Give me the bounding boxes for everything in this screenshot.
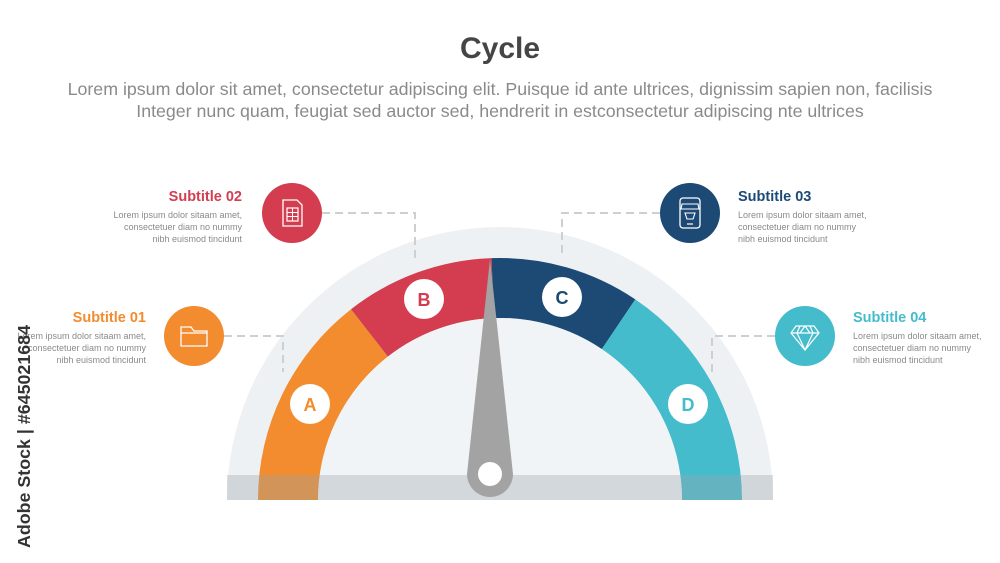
text block: subtitle 02: nibh euismod tincidunt <box>152 234 242 244</box>
description text <box>68 79 932 121</box>
text block: subtitle 02 <box>113 189 242 244</box>
label circles: A <box>304 395 316 415</box>
label circles: C <box>556 288 568 308</box>
title: Cycle <box>460 32 540 65</box>
text block: subtitle 02: consectetuer diam no nummy <box>124 222 242 232</box>
text block: subtitle 03: Lorem ipsum dolor sitaam amet, <box>738 210 867 220</box>
label circles <box>290 277 708 424</box>
gauge <box>227 227 773 500</box>
text block: subtitle 02: Subtitle 02 <box>169 189 242 205</box>
icon: folder <box>164 306 224 366</box>
segment B <box>351 258 494 357</box>
text block: subtitle 03 <box>738 189 867 244</box>
description text: Integer nunc quam, feugiat sed auctor sed, hendrerit in estconsectetur adipiscing nte ultrices <box>136 101 864 121</box>
text block: subtitle 03: consectetuer diam no nummy <box>738 222 857 232</box>
icon: shop phone <box>660 183 720 243</box>
label circles: B <box>418 290 430 310</box>
watermark side text: Adobe Stock | #645021684 <box>14 325 34 548</box>
text block: subtitle 01 <box>17 310 146 365</box>
text block: subtitle 01: Lorem ipsum dolor sitaam amet, <box>17 331 146 341</box>
description text: Lorem ipsum dolor sit amet, consectetur adipiscing elit. Puisque id ante ultrices, dignissim sapien non, facilisis <box>68 79 932 99</box>
needle <box>467 259 513 497</box>
label circles: D <box>682 395 694 415</box>
text block: subtitle 01: Subtitle 01 <box>73 310 146 326</box>
text block: subtitle 03: nibh euismod tincidunt <box>738 234 828 244</box>
segment A <box>258 309 388 500</box>
text block: subtitle 04: nibh euismod tincidunt <box>853 355 943 365</box>
icon: sim card <box>262 183 322 243</box>
text block: subtitle 04: Lorem ipsum dolor sitaam amet, <box>853 331 982 341</box>
text block: subtitle 01: nibh euismod tincidunt <box>56 355 146 365</box>
icon: diamond <box>775 306 835 366</box>
connector lines <box>224 213 775 372</box>
text block: subtitle 02: Lorem ipsum dolor sitaam amet, <box>113 210 242 220</box>
text block: subtitle 04 <box>853 310 982 365</box>
text block: subtitle 04: consectetuer diam no nummy <box>853 343 972 353</box>
segment C <box>492 258 635 349</box>
text block: subtitle 01: consectetuer diam no nummy <box>28 343 146 353</box>
text block: subtitle 03: Subtitle 03 <box>738 189 811 205</box>
text block: subtitle 04: Subtitle 04 <box>853 310 926 326</box>
segment D <box>602 299 742 500</box>
